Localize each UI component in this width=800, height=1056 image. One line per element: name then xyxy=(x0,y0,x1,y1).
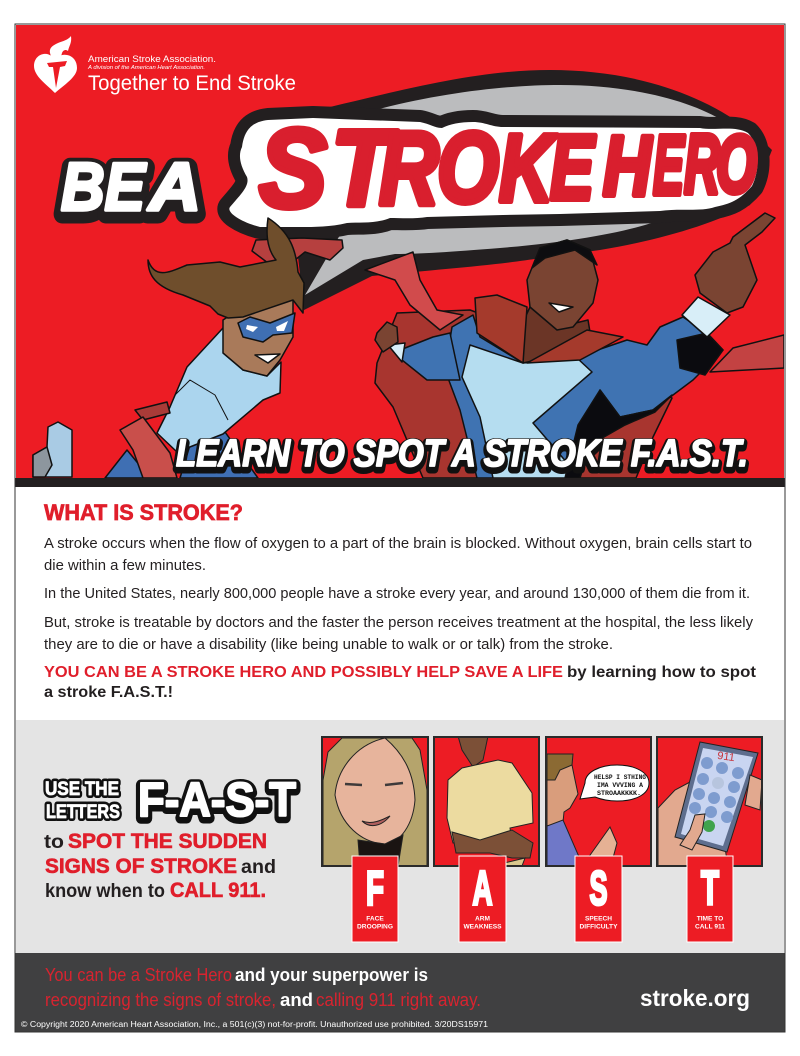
card: S speech difficulty: SPEECH xyxy=(585,916,612,922)
card: T time to call 911 xyxy=(687,856,733,942)
website: stroke.org xyxy=(640,985,750,1011)
heading: use the letters: USE THE xyxy=(45,779,119,800)
panel: what is stroke xyxy=(16,487,784,720)
heading: use the letters: LETTERS xyxy=(46,802,120,823)
heading sign: Stroke Hero: E xyxy=(653,118,686,212)
text: spot the sudden signs: SPOT THE SUDDEN xyxy=(68,830,267,853)
card: F face drooping xyxy=(352,856,398,942)
footer message: and xyxy=(280,989,313,1010)
heading sign: Stroke Hero: R xyxy=(684,117,720,211)
panel: hero banner xyxy=(15,24,785,478)
text: spot the sudden signs xyxy=(44,830,276,902)
card: S speech difficulty: S xyxy=(590,862,608,916)
card: F face drooping: DROOPING xyxy=(357,924,393,930)
heading: Be a: BE xyxy=(61,149,147,225)
card: S speech difficulty xyxy=(575,856,622,942)
heading: use the letters xyxy=(45,779,120,823)
heading: use the letters: LETTERS xyxy=(46,802,120,823)
comic panel: speech difficulty xyxy=(546,737,651,866)
heading sign: Stroke Hero: E xyxy=(550,117,596,219)
card: F face drooping: F xyxy=(366,862,384,916)
comic panel: face drooping xyxy=(322,737,428,866)
logo: American Stroke Association xyxy=(34,36,296,95)
text: spot the sudden signs: know when to xyxy=(45,881,165,902)
speech bubble xyxy=(295,70,772,310)
logo: American Stroke Association: American Stroke Association. xyxy=(88,54,216,65)
footer message: and your superpower is xyxy=(235,964,428,985)
heading sign: Stroke Hero: O xyxy=(716,119,757,210)
footer message: recognizing the signs of stroke, xyxy=(45,989,276,1010)
copyright: © Copyright 2020 American Heart Association, Inc., a 501(c)(3) not-for-profit. Unauthorized use prohibited. 3/20DS15971 xyxy=(21,1020,489,1029)
panel: use the letters FAST xyxy=(16,720,784,953)
card: T time to call 911: T xyxy=(701,862,719,916)
body text: But, stroke is treatable by doctors and the faster the person receives treatment at the hospital, the less likely xyxy=(44,615,754,631)
heading: Be a: A xyxy=(147,149,201,225)
footer message: You can be a Stroke Hero xyxy=(45,964,232,985)
card: A arm weakness xyxy=(459,856,506,942)
speech balloon xyxy=(580,765,649,801)
body text: they are to die or have a disability (like being unable to walk or or talk) from the stroke. xyxy=(44,637,613,653)
card: A arm weakness: A xyxy=(472,862,492,916)
body text: die within a few minutes. xyxy=(44,558,206,574)
heading sign: Stroke Hero: K xyxy=(499,115,558,222)
speech balloon: HELSP I STHING xyxy=(594,774,646,781)
callout: you can be a stroke hero xyxy=(44,664,756,701)
card: F face drooping: FACE xyxy=(366,916,384,922)
illustration: hero xyxy=(365,213,784,478)
heading: F-A-S-T: F-A-S-T xyxy=(138,774,296,827)
footer message xyxy=(45,964,481,1010)
callout: you can be a stroke hero: YOU CAN BE A STROKE HERO AND POSSIBLY HELP SAVE A LIFE xyxy=(44,664,563,681)
card: S speech difficulty: DIFFICULTY xyxy=(580,924,618,930)
heading: Be a xyxy=(54,158,206,224)
heading sign: Stroke Hero xyxy=(229,106,758,231)
text: spot the sudden signs: and xyxy=(241,857,276,878)
heading sign: Stroke Hero: R xyxy=(379,111,439,227)
heading: use the letters: USE THE xyxy=(45,779,119,800)
callout: you can be a stroke hero: by learning how to spot xyxy=(567,664,756,681)
logo: American Stroke Association: A division of the American Heart Association. xyxy=(87,65,205,71)
callout: you can be a stroke hero: a stroke F.A.S.T.! xyxy=(44,684,173,701)
illustration: heroine xyxy=(33,218,343,478)
heading sign: Stroke Hero: S xyxy=(259,106,327,231)
card: T time to call 911: CALL 911 xyxy=(695,924,725,930)
speech balloon: IMA VVVING A xyxy=(597,782,643,789)
comic panel: time to call 911: 911 xyxy=(716,750,736,764)
heading sign: Stroke Hero: T xyxy=(331,107,398,228)
heading sign: Stroke Hero: H xyxy=(603,119,653,213)
card: A arm weakness: WEAKNESS xyxy=(463,924,502,930)
heading sign: Stroke Hero: O xyxy=(437,112,499,224)
comic panel: time to call 911 xyxy=(657,737,762,866)
card: A arm weakness: ARM xyxy=(475,916,491,922)
speech balloon: STROAAKKKK. xyxy=(597,790,641,797)
body text: A stroke occurs when the flow of oxygen to a part of the brain is blocked. Without oxygen, brain cells start to xyxy=(44,536,752,552)
heading: Be a: A xyxy=(147,153,201,229)
text: spot the sudden signs: CALL 911. xyxy=(170,879,266,902)
comic panel: arm weakness xyxy=(434,736,539,866)
text: spot the sudden signs: SIGNS OF STROKE xyxy=(45,855,237,878)
heading: what is stroke: WHAT IS STROKE? xyxy=(44,500,243,525)
heading: F-A-S-T: F-A-S-T xyxy=(138,776,296,829)
panel: footer xyxy=(15,953,785,1032)
text: spot the sudden signs: to xyxy=(44,832,64,853)
footer message: calling 911 right away. xyxy=(316,989,481,1010)
logo: American Stroke Association: Together to End Stroke xyxy=(88,72,296,95)
heading: Be a: BE xyxy=(61,153,147,229)
card: T time to call 911: TIME TO xyxy=(697,916,723,922)
body text xyxy=(44,536,754,653)
body text: In the United States, nearly 800,000 people have a stroke every year, and around 130,000 of them die from it. xyxy=(44,586,750,602)
